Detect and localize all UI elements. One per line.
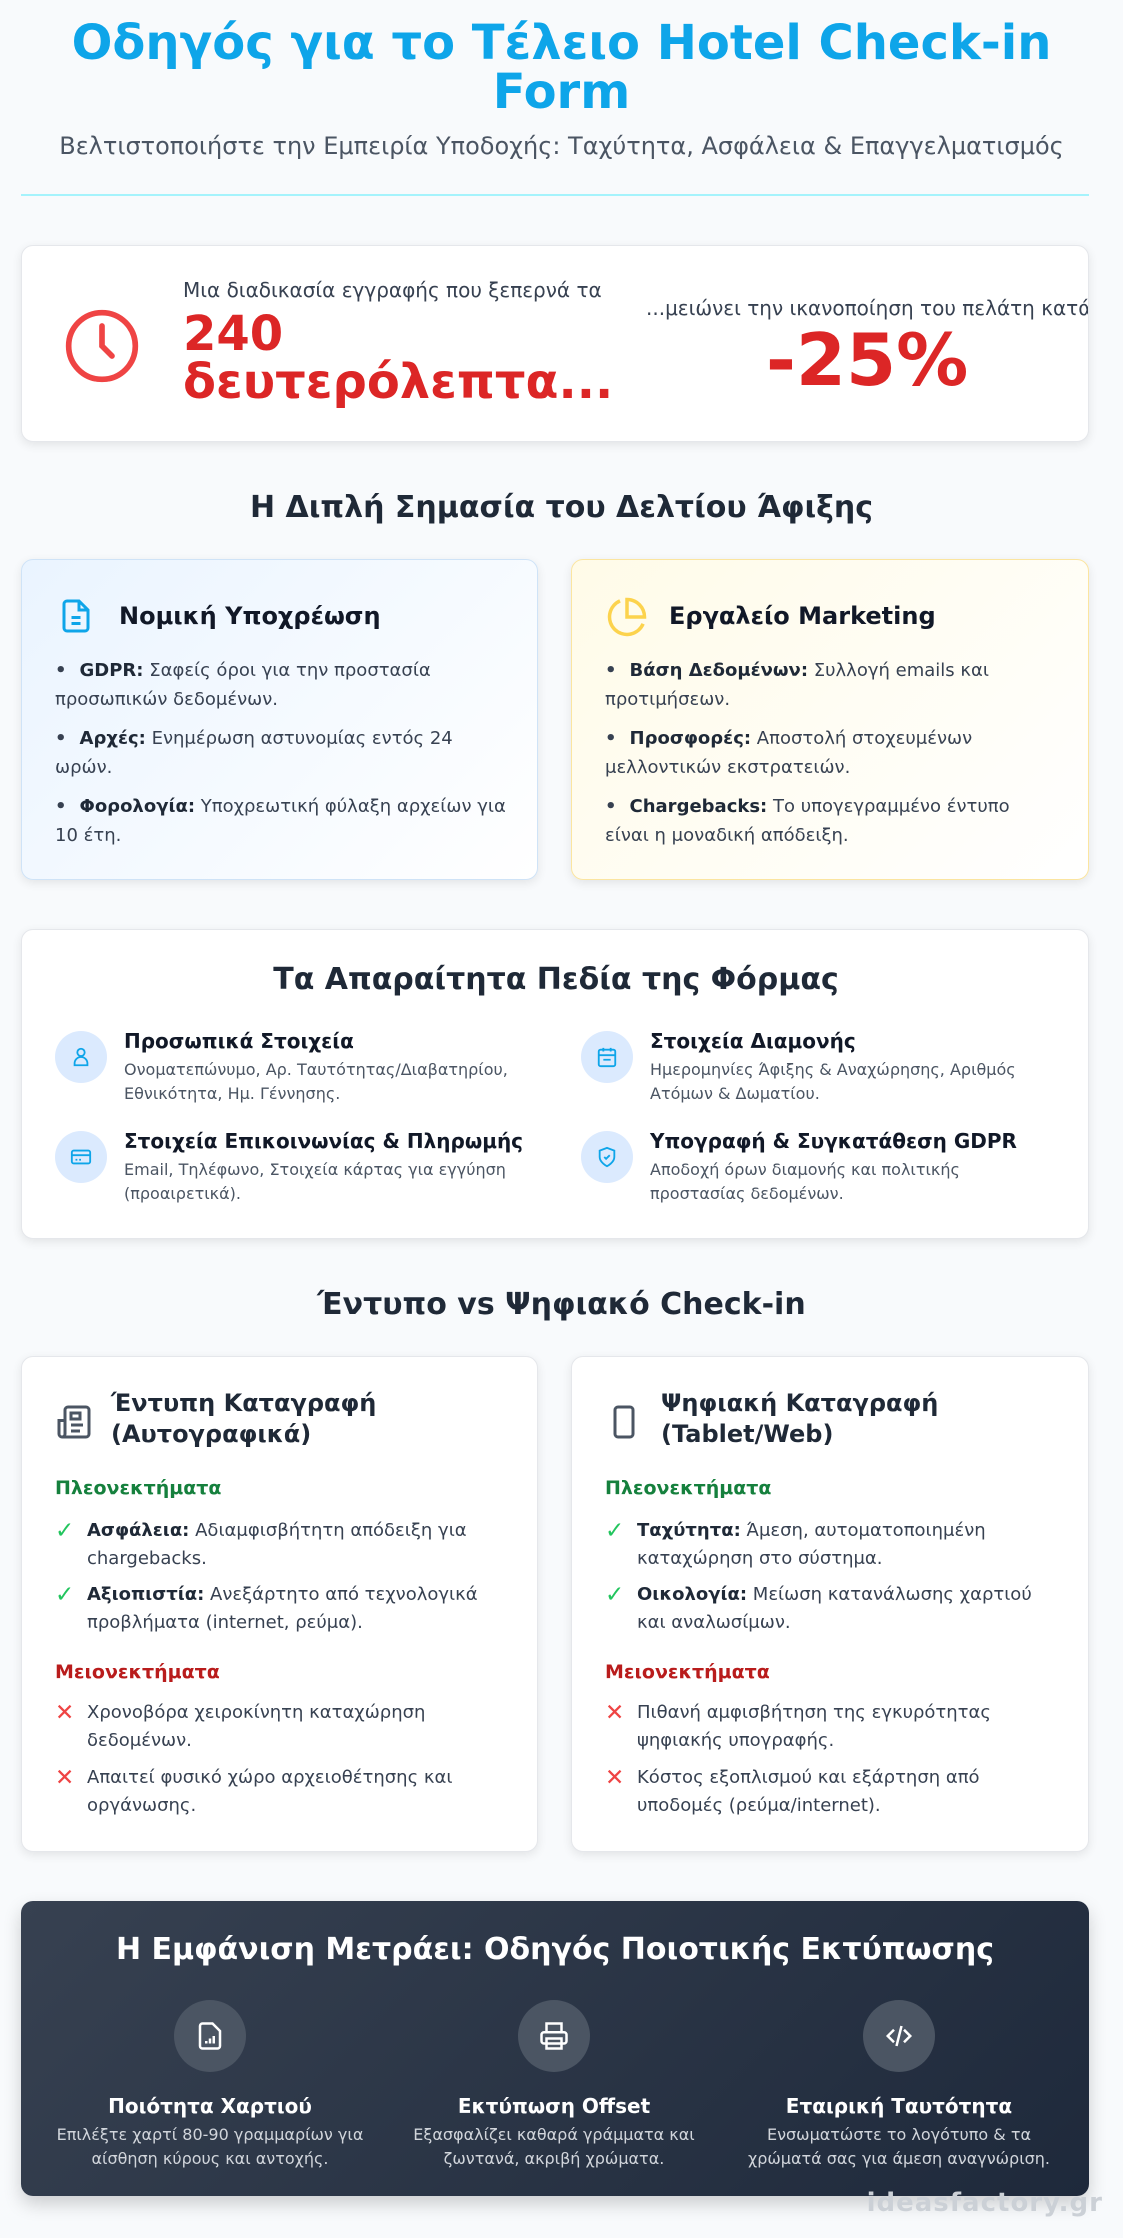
panel: marketing tool	[571, 559, 1089, 880]
icon: pie chart	[608, 598, 646, 636]
heading	[110, 1389, 376, 1448]
heading: Εργαλείο Marketing	[669, 602, 936, 630]
stat: -25%: ...μειώνει την ικανοποίηση του πελάτη κατά	[646, 296, 1089, 320]
field: stay: Στοιχεία Διαμονής	[650, 1029, 856, 1053]
item: offset printing: Εξασφαλίζει καθαρά γράμματα και ζωντανά, ακριβή χρώματα.	[413, 2125, 695, 2168]
cons: Μειονεκτήματα	[55, 1661, 220, 1683]
title: Form	[493, 64, 630, 120]
panel: paper registration: Απαιτεί φυσικό χώρο αρχειοθέτησης και οργάνωσης.	[87, 1767, 452, 1816]
field: stay	[581, 1029, 1016, 1103]
item: paper quality: Επιλέξτε χαρτί 80-90 γραμμαρίων για αίσθηση κύρους και αντοχής.	[57, 2125, 363, 2168]
field: contact & payment: Στοιχεία Επικοινωνίας & Πληρωμής	[124, 1129, 523, 1153]
list: Βάση Δεδομένων: Συλλογή emails και προτιμήσεων.	[605, 660, 989, 710]
title	[72, 15, 1051, 120]
list: Αρχές: Ενημέρωση αστυνομίας εντός 24 ωρών.	[55, 728, 453, 778]
icon: document	[62, 600, 90, 632]
panel: print quality guide	[21, 1901, 1089, 2196]
panel: paper registration: ✕	[55, 1700, 74, 1726]
field: personal: Προσωπικά Στοιχεία	[124, 1029, 354, 1053]
panel: paper registration: ✕	[55, 1765, 74, 1791]
stat: -25%	[646, 296, 1089, 402]
item: corporate identity: Ενσωματώστε το λογότυπο & τα χρώματά σας για άμεση αναγνώριση.	[748, 2125, 1050, 2168]
stat: 240 seconds: Μια διαδικασία εγγραφής που ξεπερνά τα	[183, 278, 602, 302]
panel: digital registration: ✕	[605, 1700, 624, 1726]
field: personal	[55, 1029, 508, 1103]
panel: paper registration	[21, 1356, 538, 1852]
item: paper quality	[57, 2000, 363, 2168]
panel: paper registration: Χρονοβόρα χειροκίνητη καταχώρηση δεδομένων.	[87, 1702, 425, 1751]
panel: digital registration: Κόστος εξοπλισμού και εξάρτηση από υποδομές (ρεύμα/internet).	[637, 1767, 980, 1816]
icon: tablet	[614, 1406, 634, 1438]
panel: digital registration: Οικολογία: Μείωση κατανάλωσης χαρτιού και αναλωσίμων.	[637, 1584, 1032, 1633]
list: Φορολογία: Υποχρεωτική φύλαξη αρχείων για 10 έτη.	[55, 796, 506, 846]
watermark: ideasfactory.gr	[867, 2188, 1103, 2218]
field: contact & payment: Email, Τηλέφωνο, Στοιχεία κάρτας για εγγύηση (προαιρετικά).	[124, 1160, 506, 1203]
item: offset printing: Εκτύπωση Offset	[458, 2094, 650, 2118]
stat: 240 seconds	[183, 278, 613, 410]
panel: digital registration: ✓	[605, 1518, 624, 1544]
heading: (Tablet/Web)	[661, 1420, 833, 1448]
panel: required fields	[21, 929, 1089, 1239]
heading: Τα Απαραίτητα Πεδία της Φόρμας	[273, 962, 839, 997]
heading: Έντυπη Καταγραφή	[111, 1389, 376, 1417]
heading: Νομική Υποχρέωση	[119, 602, 381, 630]
heading: dual importance: Η Διπλή Σημασία του Δελτίου Άφιξης	[250, 490, 873, 525]
icon: newspaper	[58, 1406, 90, 1438]
icon: clock	[66, 310, 138, 382]
pros: Πλεονεκτήματα	[55, 1477, 221, 1499]
field: signature GDPR: Υπογραφή & Συγκατάθεση GDPR	[650, 1129, 1017, 1153]
panel: digital registration: Πιθανή αμφισβήτηση της εγκυρότητας ψηφιακής υπογραφής.	[637, 1702, 991, 1751]
field: personal: Ονοματεπώνυμο, Αρ. Ταυτότητας/Διαβατηρίου, Εθνικότητα, Ημ. Γέννησης.	[124, 1060, 508, 1103]
stat: 240 seconds: 240	[183, 306, 283, 362]
panel: digital registration: ✕	[605, 1765, 624, 1791]
field: stay: Ημερομηνίες Άφιξης & Αναχώρησης, Αριθμός Ατόμων & Δωματίου.	[650, 1060, 1016, 1103]
panel: digital registration: Ταχύτητα: Άμεση, αυτοματοποιημένη καταχώρηση στο σύστημα.	[637, 1520, 986, 1569]
panel: paper registration: ✓	[55, 1582, 74, 1608]
stat card: -25%	[766, 318, 968, 402]
item: offset printing	[413, 2000, 695, 2168]
title: Οδηγός για το Τέλειο Hotel Check-in	[72, 15, 1051, 71]
list	[55, 660, 506, 846]
subtitle: Βελτιστοποιήστε την Εμπειρία Υποδοχής: Ταχύτητα, Ασφάλεια & Επαγγελματισμός	[59, 132, 1064, 160]
heading	[661, 1389, 938, 1448]
heading: paper vs digital: Έντυπο vs Ψηφιακό Check-in	[317, 1287, 806, 1322]
panel: paper registration: Ασφάλεια: Αδιαμφισβήτητη απόδειξη για chargebacks.	[87, 1520, 467, 1569]
field: signature GDPR	[581, 1129, 1017, 1203]
field: signature GDPR: Αποδοχή όρων διαμονής και πολιτικής προστασίας δεδομένων.	[650, 1160, 960, 1203]
panel: digital registration: ✓	[605, 1582, 624, 1608]
panel: paper registration: ✓	[55, 1518, 74, 1544]
pros: Πλεονεκτήματα	[605, 1477, 771, 1499]
cons: Μειονεκτήματα	[605, 1661, 770, 1683]
list: Chargebacks: Το υπογεγραμμένο έντυπο είναι η μοναδική απόδειξη.	[605, 796, 1010, 846]
item: corporate identity: Εταιρική Ταυτότητα	[786, 2094, 1012, 2118]
item: paper quality: Ποιότητα Χαρτιού	[108, 2094, 312, 2118]
stat card	[21, 245, 1089, 442]
field: contact & payment	[55, 1129, 523, 1203]
list: GDPR: Σαφείς όροι για την προστασία προσωπικών δεδομένων.	[55, 660, 431, 710]
panel: digital registration	[571, 1356, 1089, 1852]
panel: legal obligation	[21, 559, 538, 880]
heading: Η Εμφάνιση Μετράει: Οδηγός Ποιοτικής Εκτύπωσης	[116, 1932, 994, 1967]
heading: Ψηφιακή Καταγραφή	[661, 1389, 938, 1417]
list: Προσφορές: Αποστολή στοχευμένων μελλοντικών εκστρατειών.	[605, 728, 972, 778]
stat: 240 seconds: δευτερόλεπτα...	[183, 354, 613, 410]
item: corporate identity	[748, 2000, 1050, 2168]
heading: (Αυτογραφικά)	[111, 1420, 311, 1448]
panel: paper registration: Αξιοπιστία: Ανεξάρτητο από τεχνολογικά προβλήματα (internet, ρεύμα).	[87, 1584, 478, 1633]
list	[605, 660, 1010, 846]
